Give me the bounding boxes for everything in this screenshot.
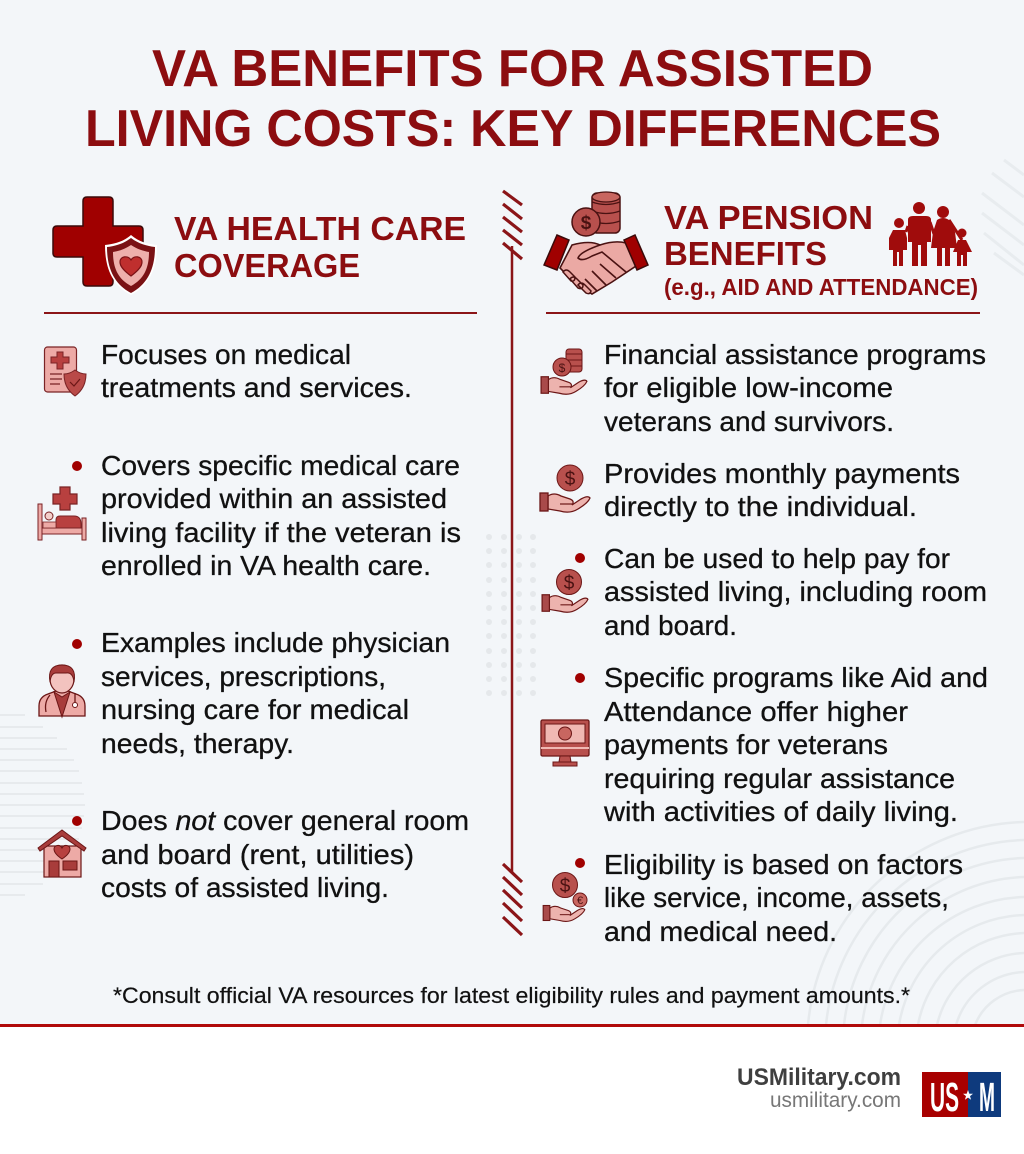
text: focuses on medical treatments: Focuses on medical [101,339,351,370]
text: examples include physician services: nursing care for medical [101,694,409,725]
icon: hospital bed with cross [38,487,86,540]
item: focuses on medical treatments [44,339,412,403]
text: can be used to help pay [604,543,987,641]
text: financial assistance programs: Financial assistance programs [604,339,986,370]
icon: hand with dollar and euro coins: $ [560,876,571,897]
footer rule [0,1024,1024,1027]
icon: hand with coin stack [541,349,587,394]
text: eligibility factors: Eligibility is based on factors [604,849,963,880]
text: covers specific medical care: enrolled in VA health care. [101,550,431,581]
text: financial assistance programs [604,339,986,437]
icon: hand with dollar coin: $ [565,469,576,490]
footer brand text [737,1064,901,1112]
center divider [503,191,522,935]
text: can be used to help pay: assisted living, including room [604,576,987,607]
title: LIVING COSTS: KEY DIFFERENCES [85,100,941,158]
text: does not cover room and board: and board (rent, utilities) [101,839,414,870]
panel: VA health care coverage [38,197,477,903]
text: eligibility factors [604,849,963,947]
item: covers specific medical care [38,450,461,581]
icon: medical document with shield [44,347,86,396]
icon: family [889,202,972,266]
text: does not cover room and board: costs of assisted living. [101,872,389,903]
text: covers specific medical care: provided within an assisted [101,483,447,514]
text: specific programs like aid and attendance [603,662,988,827]
item: eligibility factors [543,849,963,947]
text: specific programs like aid and attendance: with activities of daily living. [603,796,958,827]
text: examples include physician services: needs, therapy. [101,728,294,759]
icon: hand with dollar coin [542,570,588,612]
text: focuses on medical treatments: treatments and services. [101,372,412,403]
logo: US*M: M [979,1074,995,1120]
bullet [575,858,585,868]
icon: hand with dollar coin [540,465,590,512]
icon: medical cross with shield [53,197,157,295]
heading: VA pension benefits [664,199,978,300]
text: eligibility factors: and medical need. [604,916,837,947]
text: examples include physician services [101,627,450,759]
item: financial assistance programs [541,339,986,437]
icon: handshake with coins: $ [581,213,592,234]
text: financial assistance programs: for eligible low-income [604,372,893,403]
text: eligibility factors: like service, income, assets, [604,882,949,913]
text: does not cover room and board [101,805,469,903]
heading: VA health care coverage [174,210,466,284]
footer brand text: USMilitary.com [737,1064,901,1091]
text: financial assistance programs: veterans and survivors. [604,406,894,437]
text: specific programs like aid and attendance: requiring regular assistance [604,763,955,794]
text: examples include physician services: Examples include physician [101,627,450,658]
item: does not cover room and board [38,805,469,903]
text: provides monthly payments [604,458,960,522]
item: examples include physician services [39,627,450,759]
footer brand text: usmilitary.com [770,1089,901,1112]
text: specific programs like aid and attendance: Specific programs like Aid and [604,662,988,693]
logo: US*M [922,1072,1001,1120]
bullet [575,553,585,563]
heading: VA pension benefits: (e.g., AID AND ATTENDANCE) [664,274,978,300]
text: covers specific medical care: Covers specific medical care [101,450,460,481]
footnote: *Consult official VA resources for latest eligibility rules and payment amounts.* [113,983,910,1008]
title [85,40,941,158]
title: VA BENEFITS FOR ASSISTED [152,40,873,98]
bullet [72,461,82,471]
panel: VA pension benefits [540,192,988,947]
item: can be used to help pay [542,543,987,641]
icon: doctor [39,665,85,717]
item: provides monthly payments [540,458,960,522]
bullet [72,639,82,649]
icon: handshake with coins [544,192,648,294]
item: specific programs like aid and attendance [541,662,988,827]
text: focuses on medical treatments [101,339,412,403]
text: does not cover room and board: Does not cover general room [101,805,469,836]
bullet [575,673,585,683]
text: covers specific medical care [101,450,461,581]
icon: house with heart [38,830,86,877]
text: covers specific medical care: living facility if the veteran is [101,517,461,548]
icon: hand with dollar and euro coins: € [577,895,583,907]
icon: monitor with banknote [541,720,589,766]
text: can be used to help pay: Can be used to help pay for [604,543,950,574]
heading: VA pension benefits: BENEFITS [664,235,827,272]
icon: hand with coin stack: $ [559,361,566,375]
logo: US*M: US [930,1074,959,1120]
text: can be used to help pay: and board. [604,610,737,641]
icon: hand with dollar coin: $ [564,573,575,594]
heading: VA health care coverage: VA HEALTH CARE [174,210,466,247]
text: specific programs like aid and attendance: payments for veterans [604,729,888,760]
text: specific programs like aid and attendance: Attendance offer higher [604,696,908,727]
heading: VA health care coverage: COVERAGE [174,247,360,284]
text: examples include physician services: services, prescriptions, [101,661,386,692]
icon: hand with dollar and euro coins [543,872,587,921]
heading: VA pension benefits: VA PENSION [664,199,873,236]
text: provides monthly payments: Provides monthly payments [604,458,960,489]
text: provides monthly payments: directly to the individual. [604,491,917,522]
bullet [72,816,82,826]
